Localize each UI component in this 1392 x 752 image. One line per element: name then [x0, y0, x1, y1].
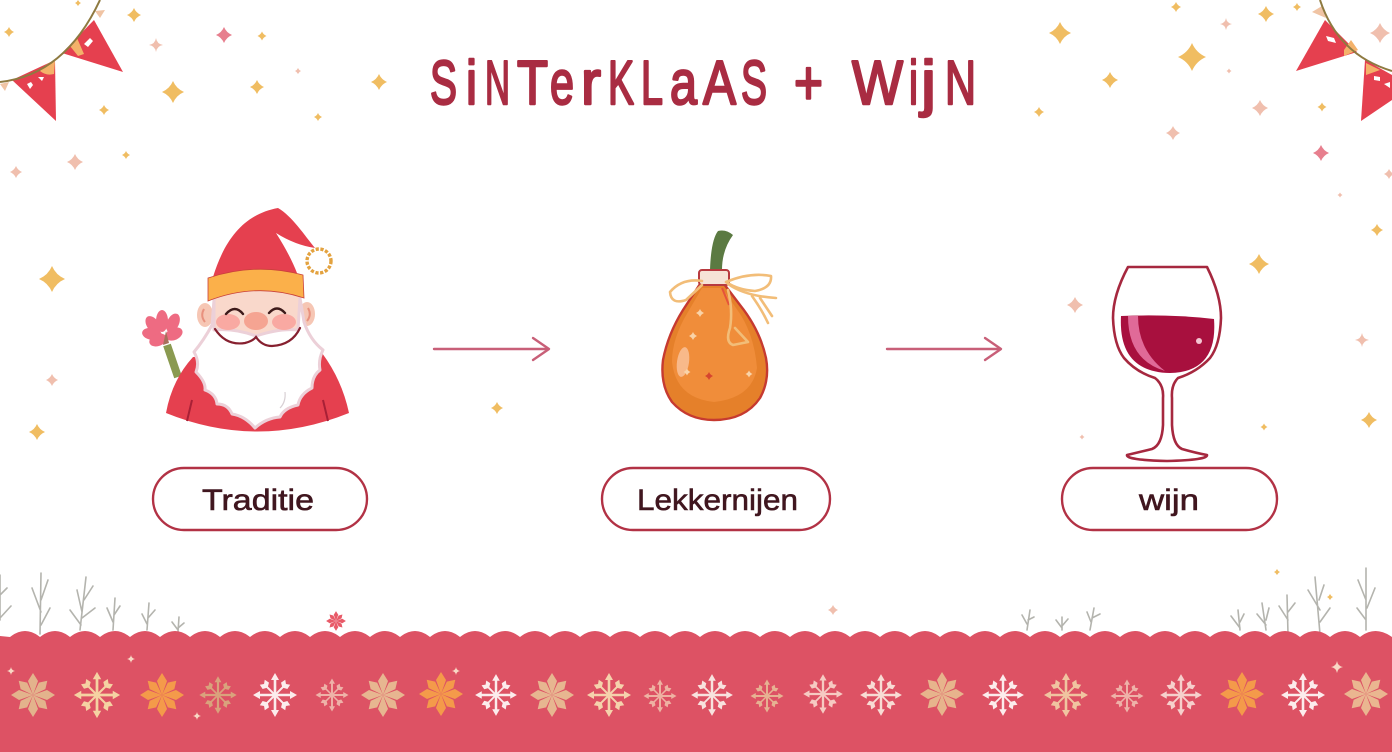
arrow: treats to wine: [887, 338, 1001, 360]
icon: orange pear pouch: [662, 230, 776, 420]
label: wijn: [1062, 468, 1277, 530]
red leaf: [326, 611, 346, 631]
red scalloped band: [0, 631, 1392, 752]
bow: [670, 275, 776, 345]
title: W: [852, 49, 903, 118]
body: [166, 353, 349, 432]
small band sparkles: [7, 655, 1343, 720]
red string: [722, 288, 729, 305]
title: S: [741, 49, 767, 118]
title: r: [581, 49, 601, 118]
eyes: [226, 308, 285, 314]
face: [213, 288, 301, 344]
snowflake row: [11, 672, 1388, 718]
label: Lekkernijen: [602, 468, 830, 530]
title: e: [550, 49, 574, 118]
beard: [194, 298, 323, 428]
speckles: [684, 309, 752, 378]
flower: [141, 310, 185, 377]
moustache: [215, 328, 300, 346]
cheeks: [216, 314, 240, 330]
pom pom: [307, 249, 331, 273]
label: Traditie: [153, 468, 367, 530]
title: T: [517, 49, 548, 118]
nose: [244, 312, 268, 330]
lighter inner: [672, 288, 757, 402]
title: L: [641, 49, 663, 118]
title: a: [670, 49, 697, 118]
title: i: [466, 49, 477, 118]
icon: wine glass: [1113, 267, 1221, 461]
title: +: [794, 49, 823, 118]
ears: [197, 302, 315, 327]
wine highlight: [1128, 316, 1165, 371]
title: N: [945, 49, 976, 118]
body: [662, 284, 767, 420]
beard curl: [280, 392, 285, 408]
hat brim: [208, 269, 304, 301]
glass outline: [1113, 267, 1221, 461]
title: [430, 49, 976, 118]
label: Traditie: Traditie: [202, 484, 314, 517]
bunting: top left: [0, 0, 123, 121]
stem: [710, 230, 733, 270]
title: i: [909, 49, 918, 118]
wine: [1121, 315, 1214, 373]
title: j: [919, 49, 936, 118]
bare winter twigs: [0, 568, 1375, 634]
bunting: top right: [1296, 0, 1392, 121]
title: K: [608, 49, 634, 118]
label: Lekkernijen: Lekkernijen: [637, 484, 798, 517]
icon: santa with flower: [141, 208, 349, 432]
title: N: [485, 49, 510, 118]
arrow: tradition to treats: [434, 338, 549, 360]
highlight: [675, 346, 691, 378]
neck: [699, 270, 729, 285]
title: S: [430, 49, 457, 118]
title: A: [703, 49, 737, 118]
hat: [213, 208, 315, 277]
label: wijn: wijn: [1138, 484, 1199, 517]
